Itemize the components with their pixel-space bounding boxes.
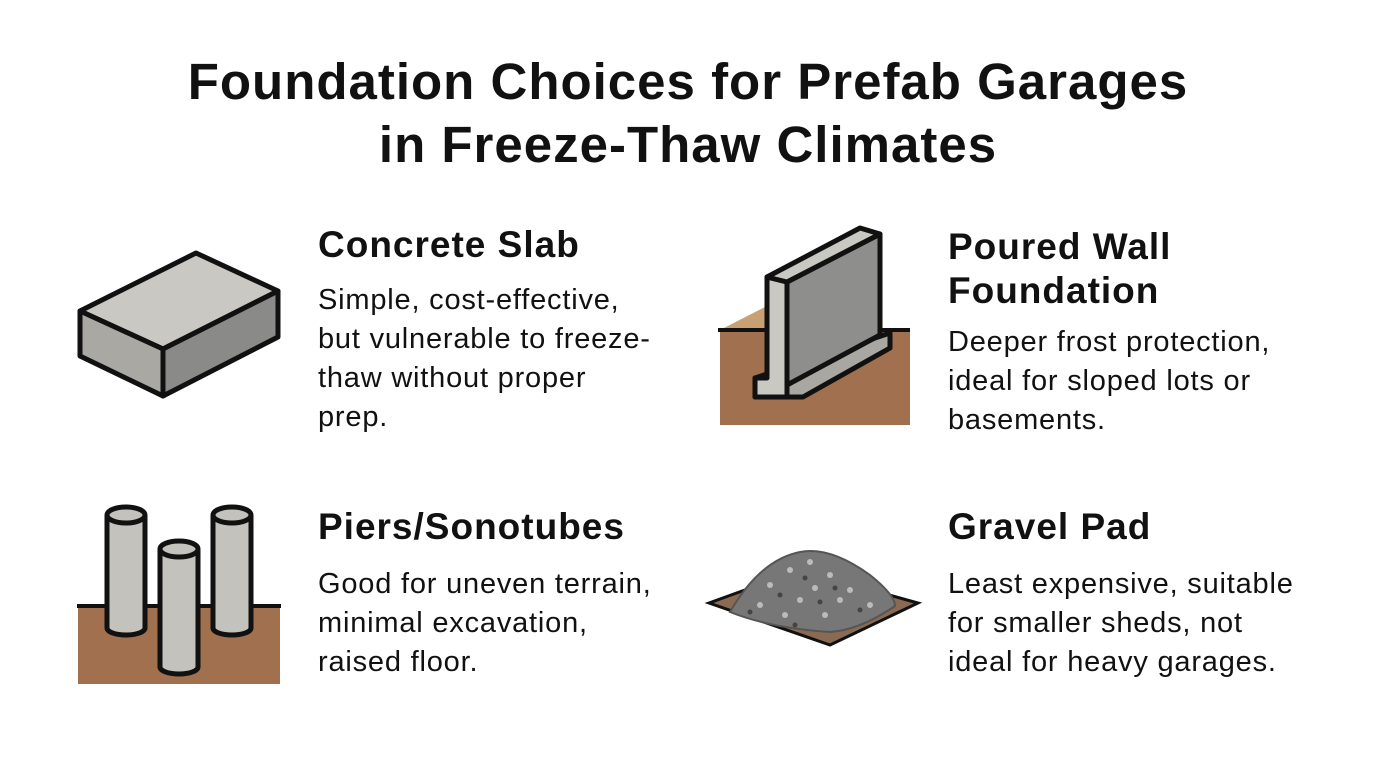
icon: poured wall <box>718 228 910 425</box>
text: poured wall: Deeper frost protection, <box>948 326 1270 358</box>
text: gravel pad: for smaller sheds, not <box>948 607 1243 639</box>
heading: poured wall: Foundation <box>948 270 1159 311</box>
text: piers: Good for uneven terrain, <box>318 568 652 600</box>
text: gravel pad <box>948 568 1294 678</box>
title: Foundation Choices for Prefab Garages <box>188 53 1188 110</box>
text: concrete slab: prep. <box>318 401 388 433</box>
title <box>188 53 1188 173</box>
text: concrete slab: but vulnerable to freeze- <box>318 323 651 355</box>
heading: concrete slab: Concrete Slab <box>318 224 580 265</box>
icon: piers <box>77 507 281 684</box>
icon: gravel pad <box>709 551 918 645</box>
heading: piers: Piers/Sonotubes <box>318 506 625 547</box>
text: piers: minimal excavation, <box>318 607 588 639</box>
title: in Freeze-Thaw Climates <box>379 116 997 173</box>
text: gravel pad: Least expensive, suitable <box>948 568 1294 600</box>
text: poured wall: ideal for sloped lots or <box>948 365 1251 397</box>
heading: poured wall <box>948 226 1171 311</box>
icon: concrete slab <box>80 253 278 396</box>
text: concrete slab: thaw without proper <box>318 362 586 394</box>
heading: poured wall: Poured Wall <box>948 226 1171 267</box>
text: poured wall <box>948 326 1270 436</box>
text: concrete slab <box>318 284 651 433</box>
text: piers <box>318 568 652 678</box>
text: gravel pad: ideal for heavy garages. <box>948 646 1277 678</box>
text: piers: raised floor. <box>318 646 478 678</box>
text: poured wall: basements. <box>948 404 1106 436</box>
text: concrete slab: Simple, cost-effective, <box>318 284 620 316</box>
heading: gravel pad: Gravel Pad <box>948 506 1151 547</box>
